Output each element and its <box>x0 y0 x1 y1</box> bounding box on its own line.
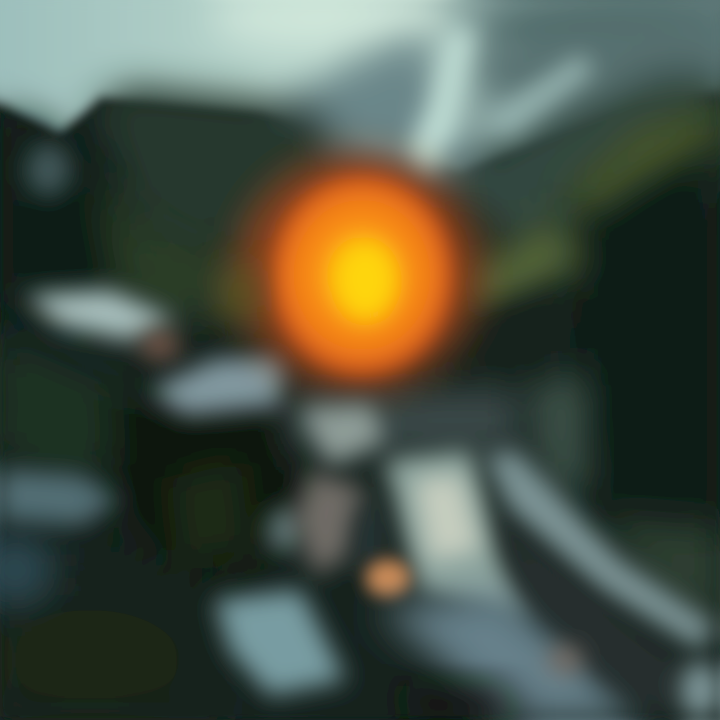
bridge railing on right <box>485 450 720 720</box>
distant mountains <box>95 25 720 320</box>
dark valley haze under sun <box>290 390 520 450</box>
left cliffs <box>0 110 310 720</box>
right cliffs with moss <box>420 105 720 630</box>
central stream and rapids <box>215 405 640 720</box>
sky <box>0 0 720 170</box>
orange sun glow <box>220 154 480 390</box>
pale white rocks and houses on left <box>0 144 303 605</box>
waterfall streak and mist <box>408 30 595 178</box>
